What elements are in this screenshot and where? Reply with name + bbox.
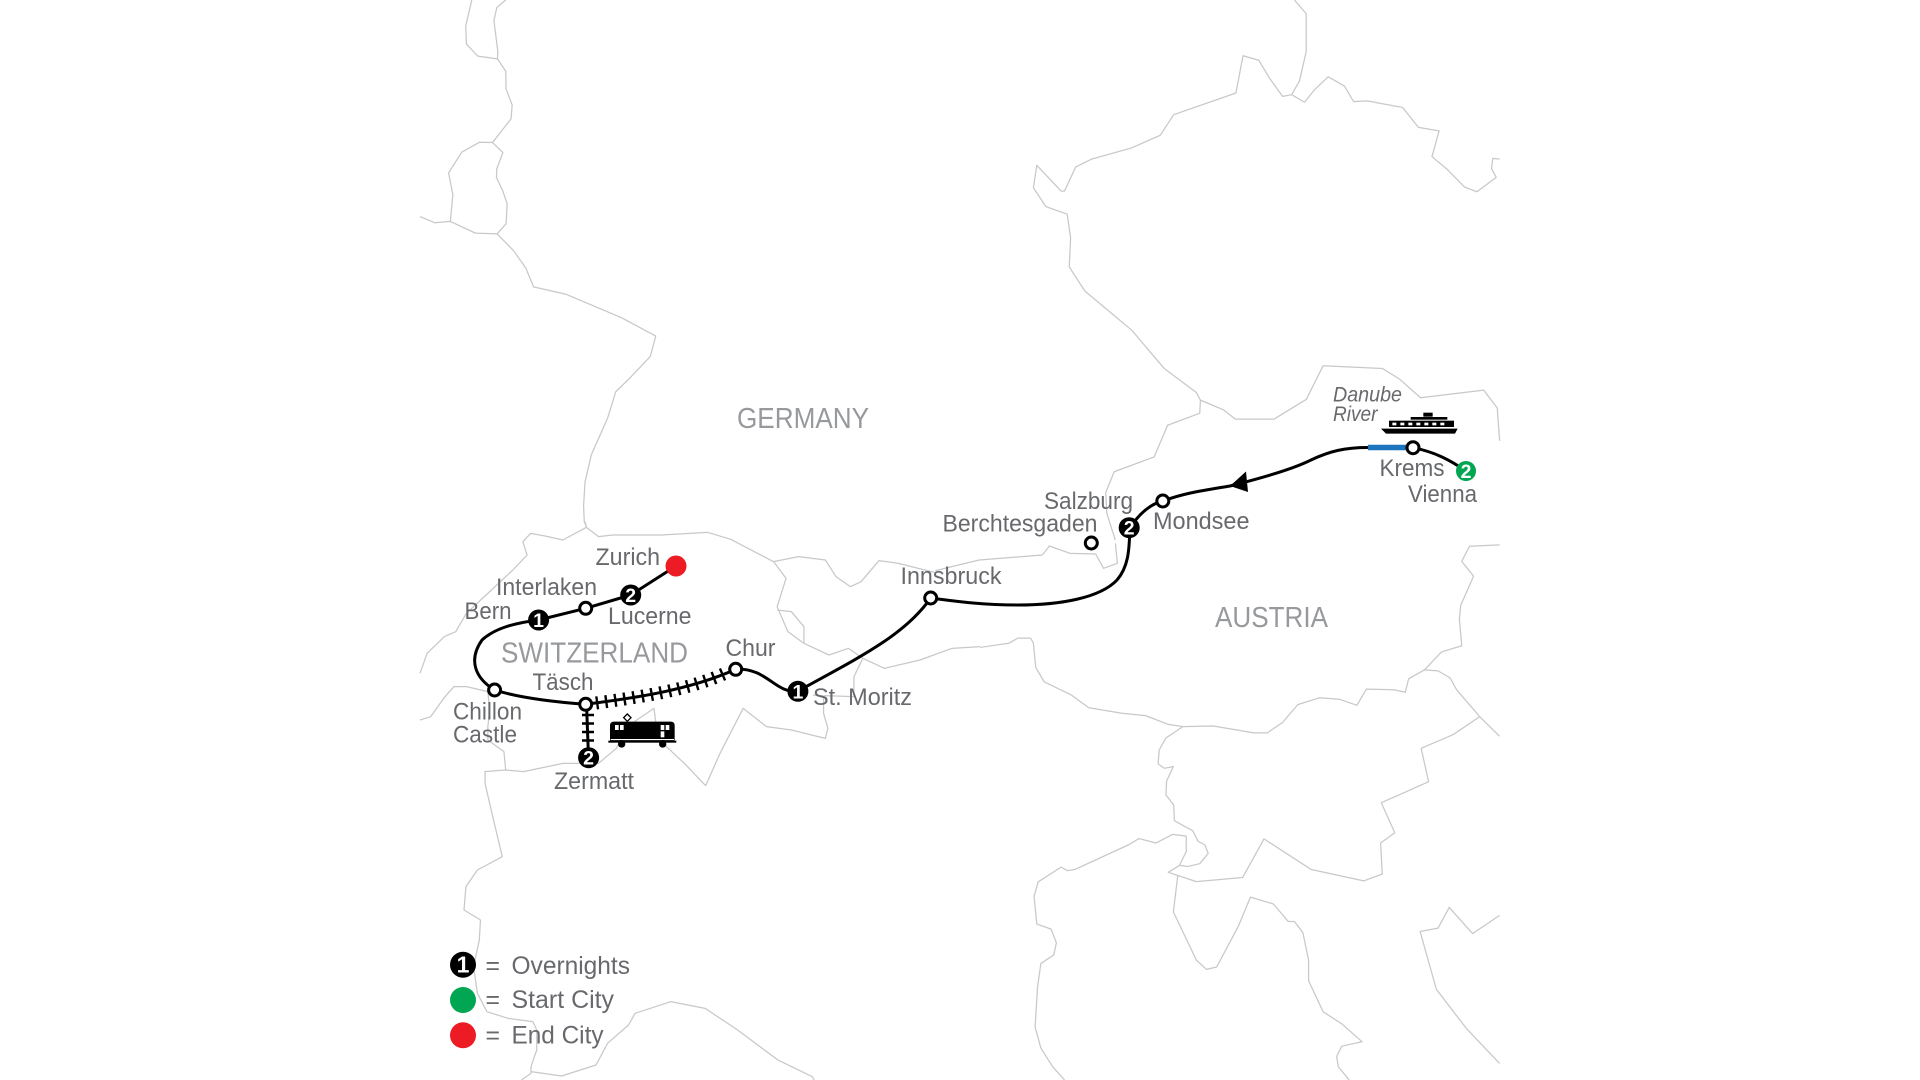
overnight badge: St. Moritz: 1 bbox=[792, 681, 803, 703]
river label: River bbox=[1333, 403, 1378, 426]
stop markers bbox=[489, 442, 1419, 710]
legend: start city bbox=[450, 986, 614, 1014]
rail line: Täsch to Zermatt bbox=[582, 704, 594, 757]
city labels: Berchtesgaden bbox=[942, 510, 1098, 538]
city labels: Castle bbox=[453, 722, 517, 748]
city labels: Zermatt bbox=[554, 768, 634, 795]
river section bbox=[1368, 445, 1408, 450]
city labels: Interlaken bbox=[496, 574, 597, 601]
legend: start city: Start City bbox=[512, 986, 614, 1014]
legend: overnights bbox=[450, 952, 630, 980]
legend: end city: End City bbox=[512, 1022, 604, 1050]
city labels: Zurich bbox=[596, 544, 660, 571]
legend: end city: = bbox=[486, 1022, 500, 1050]
overnight badge: Salzburg bbox=[1119, 517, 1140, 540]
city labels: Krems bbox=[1380, 455, 1444, 482]
overnight badge: Salzburg: 2 bbox=[1124, 518, 1135, 540]
overnight badge: Bern bbox=[528, 610, 549, 632]
city labels: Täsch bbox=[532, 669, 594, 696]
overnight badge: Bern: 1 bbox=[533, 610, 544, 632]
overnight badge: St. Moritz bbox=[787, 681, 808, 703]
city labels: Chur bbox=[726, 635, 776, 662]
city labels bbox=[453, 455, 1478, 795]
legend: overnights: 1 bbox=[457, 952, 470, 978]
city labels: Innsbruck bbox=[900, 563, 1002, 590]
country borders bbox=[420, 0, 1500, 1080]
city labels: Chillon bbox=[453, 698, 522, 726]
legend: overnights: = bbox=[486, 952, 500, 980]
start city marker: Vienna: 2 bbox=[1461, 461, 1472, 483]
rail line: Täsch to Chur bbox=[586, 669, 736, 704]
city labels: Lucerne bbox=[608, 603, 692, 630]
city labels: Bern bbox=[464, 598, 512, 625]
country labels: GERMANY bbox=[737, 403, 869, 435]
icon: train bbox=[608, 714, 676, 748]
river label bbox=[1333, 384, 1402, 426]
city labels: St. Moritz bbox=[813, 684, 912, 711]
city labels: Mondsee bbox=[1153, 508, 1250, 535]
legend: overnights: Overnights bbox=[512, 952, 630, 980]
legend: start city: = bbox=[486, 986, 500, 1014]
start city marker: Vienna bbox=[1456, 461, 1476, 483]
country labels bbox=[501, 403, 1329, 670]
route lines bbox=[475, 448, 1466, 704]
overnight badge: Lucerne: 2 bbox=[625, 585, 636, 607]
city labels: Vienna bbox=[1408, 481, 1478, 508]
direction arrow bbox=[1230, 472, 1248, 492]
end city marker: Zurich bbox=[666, 556, 686, 576]
country labels: SWITZERLAND bbox=[501, 638, 688, 670]
icon: ferry bbox=[1381, 413, 1458, 434]
city labels: Salzburg bbox=[1044, 488, 1133, 515]
country labels: AUSTRIA bbox=[1215, 602, 1329, 634]
legend bbox=[450, 952, 630, 1050]
overnight badge: Zermatt bbox=[578, 747, 599, 770]
river label: Danube bbox=[1333, 384, 1402, 406]
overnight badge: Lucerne bbox=[620, 584, 641, 607]
overnight badge: Zermatt: 2 bbox=[583, 748, 594, 770]
legend: end city bbox=[450, 1022, 604, 1050]
